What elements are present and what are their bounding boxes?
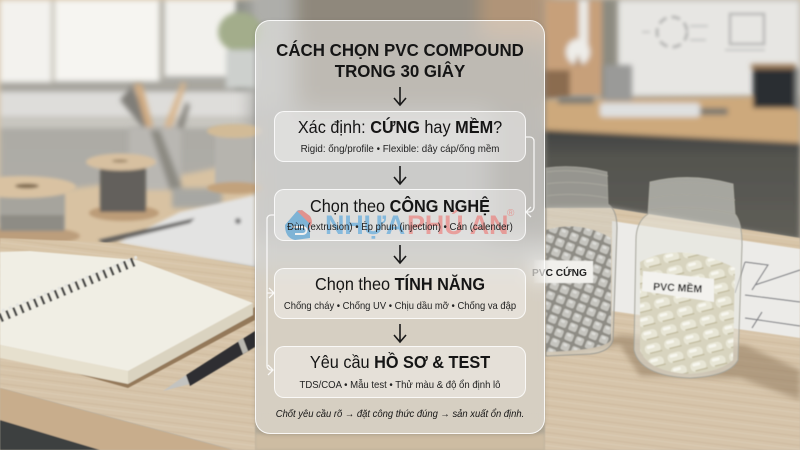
jar: PVC mềm: PVC MỀM (653, 280, 703, 296)
jar: PVC cứng (534, 167, 617, 356)
plant in pot (218, 12, 262, 88)
step 2 card (274, 189, 526, 241)
blueprint sheet on desk (98, 195, 255, 267)
desk visible below panel (255, 434, 545, 450)
step 3 card (274, 268, 526, 319)
step 2 detail: Đùn (extrusion) • Ép phun (injection) • Cán (calender) (287, 222, 513, 233)
arrow: step 3 to step 4 (394, 324, 406, 342)
step 1 detail: Rigid: ống/profile • Flexible: dây cáp/ống mềm (301, 144, 499, 155)
pencil cup (120, 82, 222, 208)
front desk wood right (545, 208, 800, 450)
logo watermark: Nhựa Phú An (285, 208, 514, 240)
arrow: step 1 to step 2 (394, 166, 406, 184)
scene behind glass panel (250, 0, 550, 450)
step 4 card (274, 346, 526, 398)
logo watermark: Nhựa Phú An: NHỰA (325, 210, 405, 240)
blueprint sheet under jars (612, 221, 800, 338)
pegboard and wrench (545, 0, 620, 100)
jar: PVC mềm (634, 177, 742, 378)
logo watermark: Nhựa Phú An: ® (507, 208, 514, 219)
step 1 card (274, 111, 526, 162)
arrow: step 2 to step 3 (394, 245, 406, 263)
closing note: Chốt yêu cầu rõ → đặt công thức đúng → sản xuất ổn định. (276, 409, 524, 420)
step 4 heading: Yêu cầu HỒ SƠ & TEST (310, 352, 490, 372)
desk front edge (0, 388, 233, 450)
back desk (0, 160, 255, 260)
jar label: PVC cứng: PVC CỨNG (532, 266, 587, 279)
notebook (0, 251, 255, 388)
pen (163, 331, 255, 391)
back shelf and dark cabinet (545, 64, 800, 240)
step 3 detail: Chống cháy • Chống UV • Chịu dầu mỡ • Chống va đập (284, 301, 516, 312)
arrow: title to step 1 (394, 87, 406, 105)
front desk wood left (0, 238, 255, 450)
step 3 heading: Chọn theo TÍNH NĂNG (315, 274, 485, 294)
panel: glass infographic panel (255, 20, 545, 434)
title: TRONG 30 GIÂY (335, 61, 465, 81)
title (276, 40, 524, 81)
step 1 heading: Xác định: CỨNG hay MỀM? (298, 117, 502, 137)
step 2 heading: Chọn theo CÔNG NGHỆ (310, 196, 490, 216)
wire spools (0, 124, 263, 245)
step 4 detail: TDS/COA • Mẫu test • Thử màu & độ ổn định lô (299, 380, 501, 391)
jar shadows (545, 335, 800, 400)
title: CÁCH CHỌN PVC COMPOUND (276, 40, 524, 60)
logo watermark: Nhựa Phú An: PHÚ AN (407, 210, 508, 240)
whiteboard with sketches (618, 0, 800, 96)
